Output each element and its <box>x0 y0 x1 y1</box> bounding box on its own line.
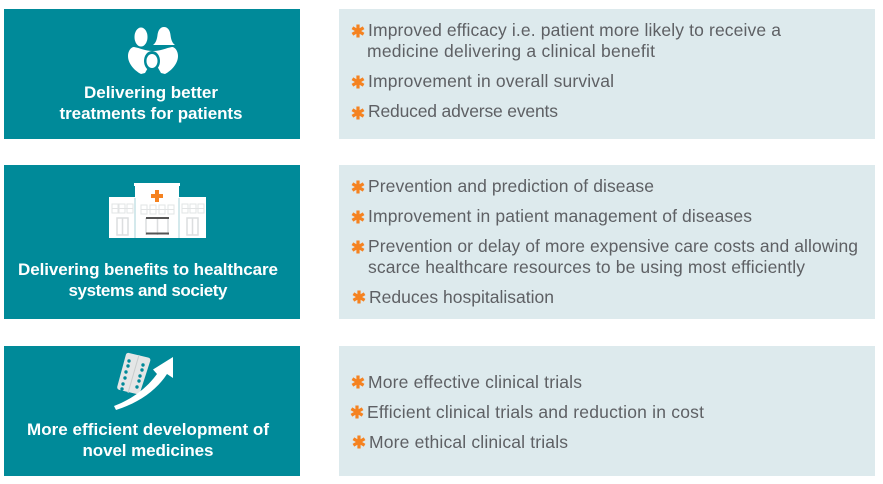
bullet: care costs: Prevention or delay of more expensive care costs and allowing <box>368 236 858 256</box>
bullet: adverse events: Reduced adverse events <box>368 101 558 121</box>
bullet: effective trials: More effective clinical trials <box>368 372 582 392</box>
heading: healthcare systems: Delivering benefits to healthcare <box>18 260 278 279</box>
bullet: patient management: Improvement in patient management of diseases <box>368 206 752 226</box>
bullet: care costs: scarce healthcare resources to be using most efficiently <box>368 257 805 277</box>
panel: benefits list 1 <box>339 9 875 139</box>
icon: hospital <box>109 183 206 238</box>
panel: healthcare systems <box>4 165 300 319</box>
bullet: hospitalisation: Reduces hospitalisation <box>369 287 554 307</box>
heading: better treatments: Delivering better <box>84 83 218 102</box>
bullet: prevention and prediction: Prevention and prediction of disease <box>368 176 654 196</box>
bullet: ethical trials: More ethical clinical trials <box>369 432 568 452</box>
panel: benefits list 2 <box>339 165 875 319</box>
bullet: improved efficacy <box>352 20 781 61</box>
panel: efficient development <box>4 346 300 476</box>
panel: better treatments <box>4 9 300 139</box>
heading: better treatments: treatments for patients <box>60 104 242 123</box>
heading: healthcare systems: systems and society <box>68 281 228 300</box>
heading: efficient development: More efficient development of <box>27 420 269 439</box>
icon: blister pack and arrow <box>114 353 173 410</box>
bullet: overall survival: Improvement in overall survival <box>368 71 614 91</box>
bullet: improved efficacy: medicine delivering a clinical benefit <box>367 41 655 61</box>
heading: efficient development: novel medicines <box>82 441 214 460</box>
icon: family <box>128 27 178 74</box>
bullet: improved efficacy: Improved efficacy i.e. patient more likely to receive a <box>368 20 781 40</box>
bullet: reduction in cost: Efficient clinical trials and reduction in cost <box>367 402 704 422</box>
panel: benefits list 3 <box>339 346 875 476</box>
bullet: care costs <box>352 236 858 277</box>
